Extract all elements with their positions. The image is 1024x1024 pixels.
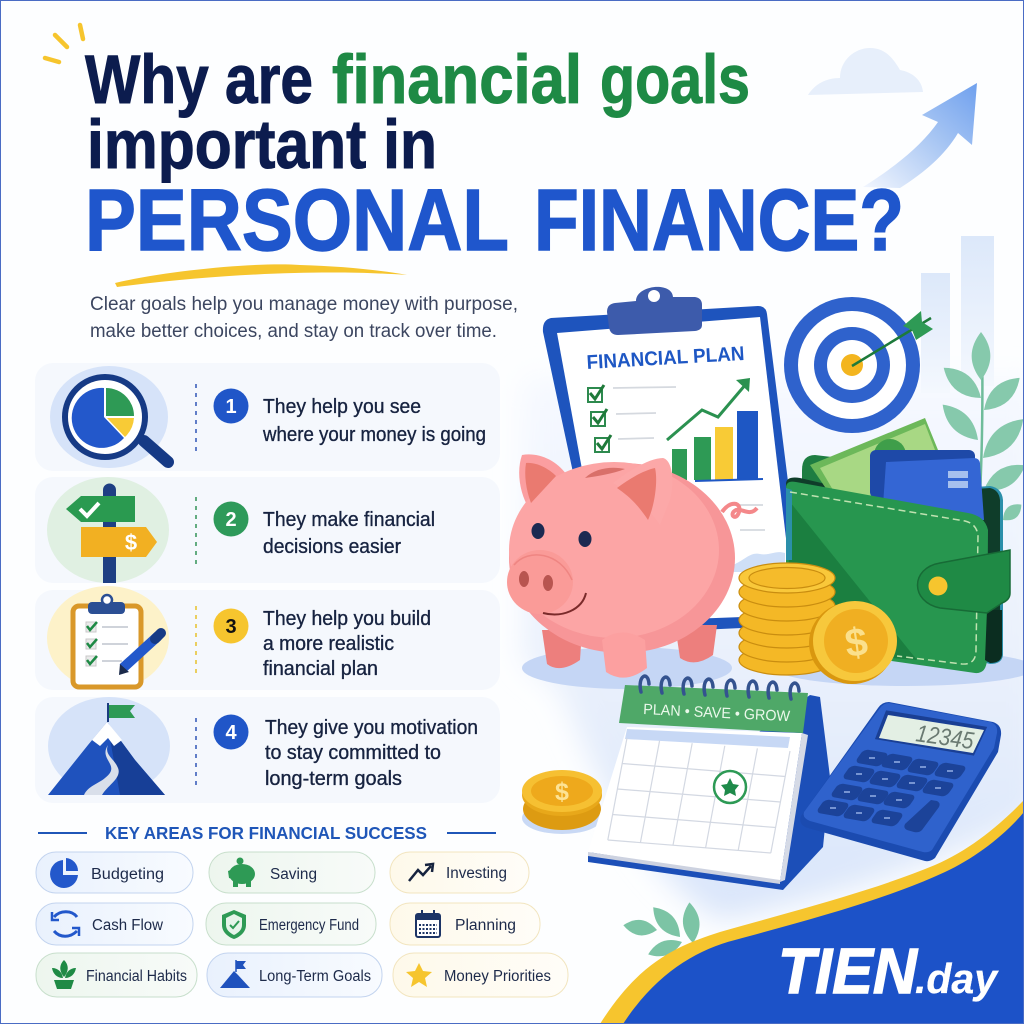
icon: mountain with flag	[48, 703, 165, 795]
pill: Cash Flow: Cash Flow	[92, 917, 164, 934]
cloud	[808, 48, 923, 95]
illustration: plant right	[936, 332, 1024, 530]
brand logo: .day	[915, 955, 1000, 1002]
title: PERSONAL	[85, 172, 509, 269]
illustration: piggy bank	[507, 454, 757, 678]
text: reason 4	[265, 717, 478, 790]
subtitle: Clear goals help you manage money with purpose,	[90, 294, 518, 315]
illustration: small coins: $	[555, 778, 569, 806]
sun ticks	[45, 25, 83, 62]
pill: Planning: Planning	[455, 917, 516, 934]
checklist	[588, 385, 676, 452]
icon: star	[406, 963, 432, 987]
pill: Budgeting: Budgeting	[91, 866, 164, 883]
panel: reason 1	[35, 363, 500, 471]
pill: Saving: Saving	[270, 866, 317, 883]
illustration: target	[784, 297, 933, 433]
bar chart	[667, 378, 763, 481]
panel: reason 3	[35, 586, 500, 690]
title: FINANCE?	[534, 172, 904, 269]
number badge 3	[214, 608, 248, 644]
icon: magnifier with pie chart	[65, 377, 168, 462]
text: reason 2: decisions easier	[263, 536, 401, 558]
illustration: wallet shadow	[775, 650, 1024, 686]
illustration: small coins	[522, 770, 602, 834]
icon: checklist clipboard	[73, 595, 161, 687]
pill: Money Priorities	[393, 953, 568, 997]
icon: signpost: $	[125, 530, 137, 555]
footer swoosh	[600, 800, 1024, 1024]
wallet lower back strip	[985, 610, 1002, 663]
calendar header	[619, 685, 808, 733]
pill: Financial Habits	[36, 953, 197, 997]
number badge 2	[214, 502, 248, 536]
growth arrow	[863, 83, 977, 188]
illustration: small leaves	[622, 902, 701, 961]
text: reason 2	[263, 509, 435, 558]
number badge 2: 2	[225, 509, 237, 531]
calendar grid	[608, 738, 790, 853]
heading: key areas: KEY AREAS FOR FINANCIAL SUCCESS	[105, 823, 427, 843]
title: Why are	[85, 41, 313, 118]
text: reason 4: to stay committed to	[265, 742, 441, 764]
illustration: front coin	[809, 601, 897, 684]
background floor	[523, 377, 1024, 920]
clip	[607, 287, 702, 335]
icon: calendar	[416, 910, 440, 937]
icon: pie	[50, 858, 78, 888]
pill: Long-Term Goals	[207, 953, 382, 997]
pill: Investing	[390, 852, 529, 893]
illustration: clipboard	[543, 287, 806, 634]
wallet strap	[918, 550, 1010, 613]
text: reason 3	[263, 608, 431, 680]
calculator keys	[815, 749, 968, 832]
panel: reason 2	[35, 477, 500, 583]
icon: seedling	[52, 960, 76, 989]
calendar star mark	[714, 771, 746, 803]
pill: Saving	[209, 852, 375, 893]
text: reason 3: a more realistic	[263, 633, 394, 655]
icon: trend arrow	[409, 864, 433, 881]
wallet back	[786, 455, 1003, 664]
illustration: coin stack	[739, 563, 835, 675]
tail	[722, 504, 757, 517]
illustration: calendar	[588, 676, 830, 890]
illustration: calendar: PLAN • SAVE • GROW	[643, 701, 791, 725]
title: goals	[600, 41, 750, 118]
calculator screen: 12345	[914, 720, 976, 755]
icon: cycle arrows	[52, 912, 79, 936]
subtitle	[90, 294, 518, 342]
pill: Emergency Fund	[206, 903, 376, 945]
title: financial	[332, 41, 582, 118]
text: reason 2: They make financial	[263, 509, 435, 531]
illustration: piggy shadow	[522, 647, 732, 689]
pill: Money Priorities: Money Priorities	[444, 968, 551, 985]
calculator screen	[877, 712, 985, 755]
pill: Emergency Fund: Emergency Fund	[259, 917, 359, 934]
icon: small mountain	[220, 960, 250, 988]
pill: Budgeting	[36, 852, 193, 893]
number badge 1: 1	[225, 396, 237, 418]
illustration: calculator	[800, 702, 1001, 861]
text: reason 4: They give you motivation	[265, 717, 478, 739]
subtitle: make better choices, and stay on track over time.	[90, 321, 497, 342]
icon: green piggy	[228, 858, 255, 887]
text: reason 1: They help you see	[263, 396, 421, 418]
clipboard heading: FINANCIAL PLAN	[586, 343, 745, 374]
pill: Long-Term Goals: Long-Term Goals	[259, 968, 371, 985]
pill: Financial Habits: Financial Habits	[86, 968, 187, 985]
cash	[810, 418, 938, 497]
calendar rings	[640, 676, 799, 699]
number badge 1	[214, 388, 248, 424]
title: important in	[87, 106, 437, 183]
wallet front	[786, 482, 988, 673]
number badge 4	[214, 714, 248, 750]
icon: shield	[222, 910, 246, 939]
title underline	[115, 264, 407, 287]
text: reason 1: where your money is going	[262, 424, 486, 446]
text: reason 3: They help you build	[263, 608, 431, 630]
text: reason 3: financial plan	[263, 658, 378, 680]
text: reason 1	[262, 396, 486, 446]
brand logo: TIEN	[778, 935, 919, 1007]
cards	[870, 450, 984, 520]
number badge 4: 4	[225, 722, 237, 744]
title	[85, 41, 904, 269]
pill: Planning	[390, 903, 540, 945]
illustration: wallet	[786, 418, 1010, 673]
icon: signpost	[66, 484, 157, 583]
pill: Investing: Investing	[446, 865, 507, 882]
number badge 3: 3	[225, 616, 237, 638]
illustration: front coin: $	[842, 620, 870, 666]
pill: Cash Flow	[36, 903, 193, 945]
brand logo	[778, 935, 1000, 1007]
panel: reason 4	[35, 697, 500, 803]
background bars	[921, 236, 994, 393]
text: reason 4: long-term goals	[265, 768, 402, 790]
